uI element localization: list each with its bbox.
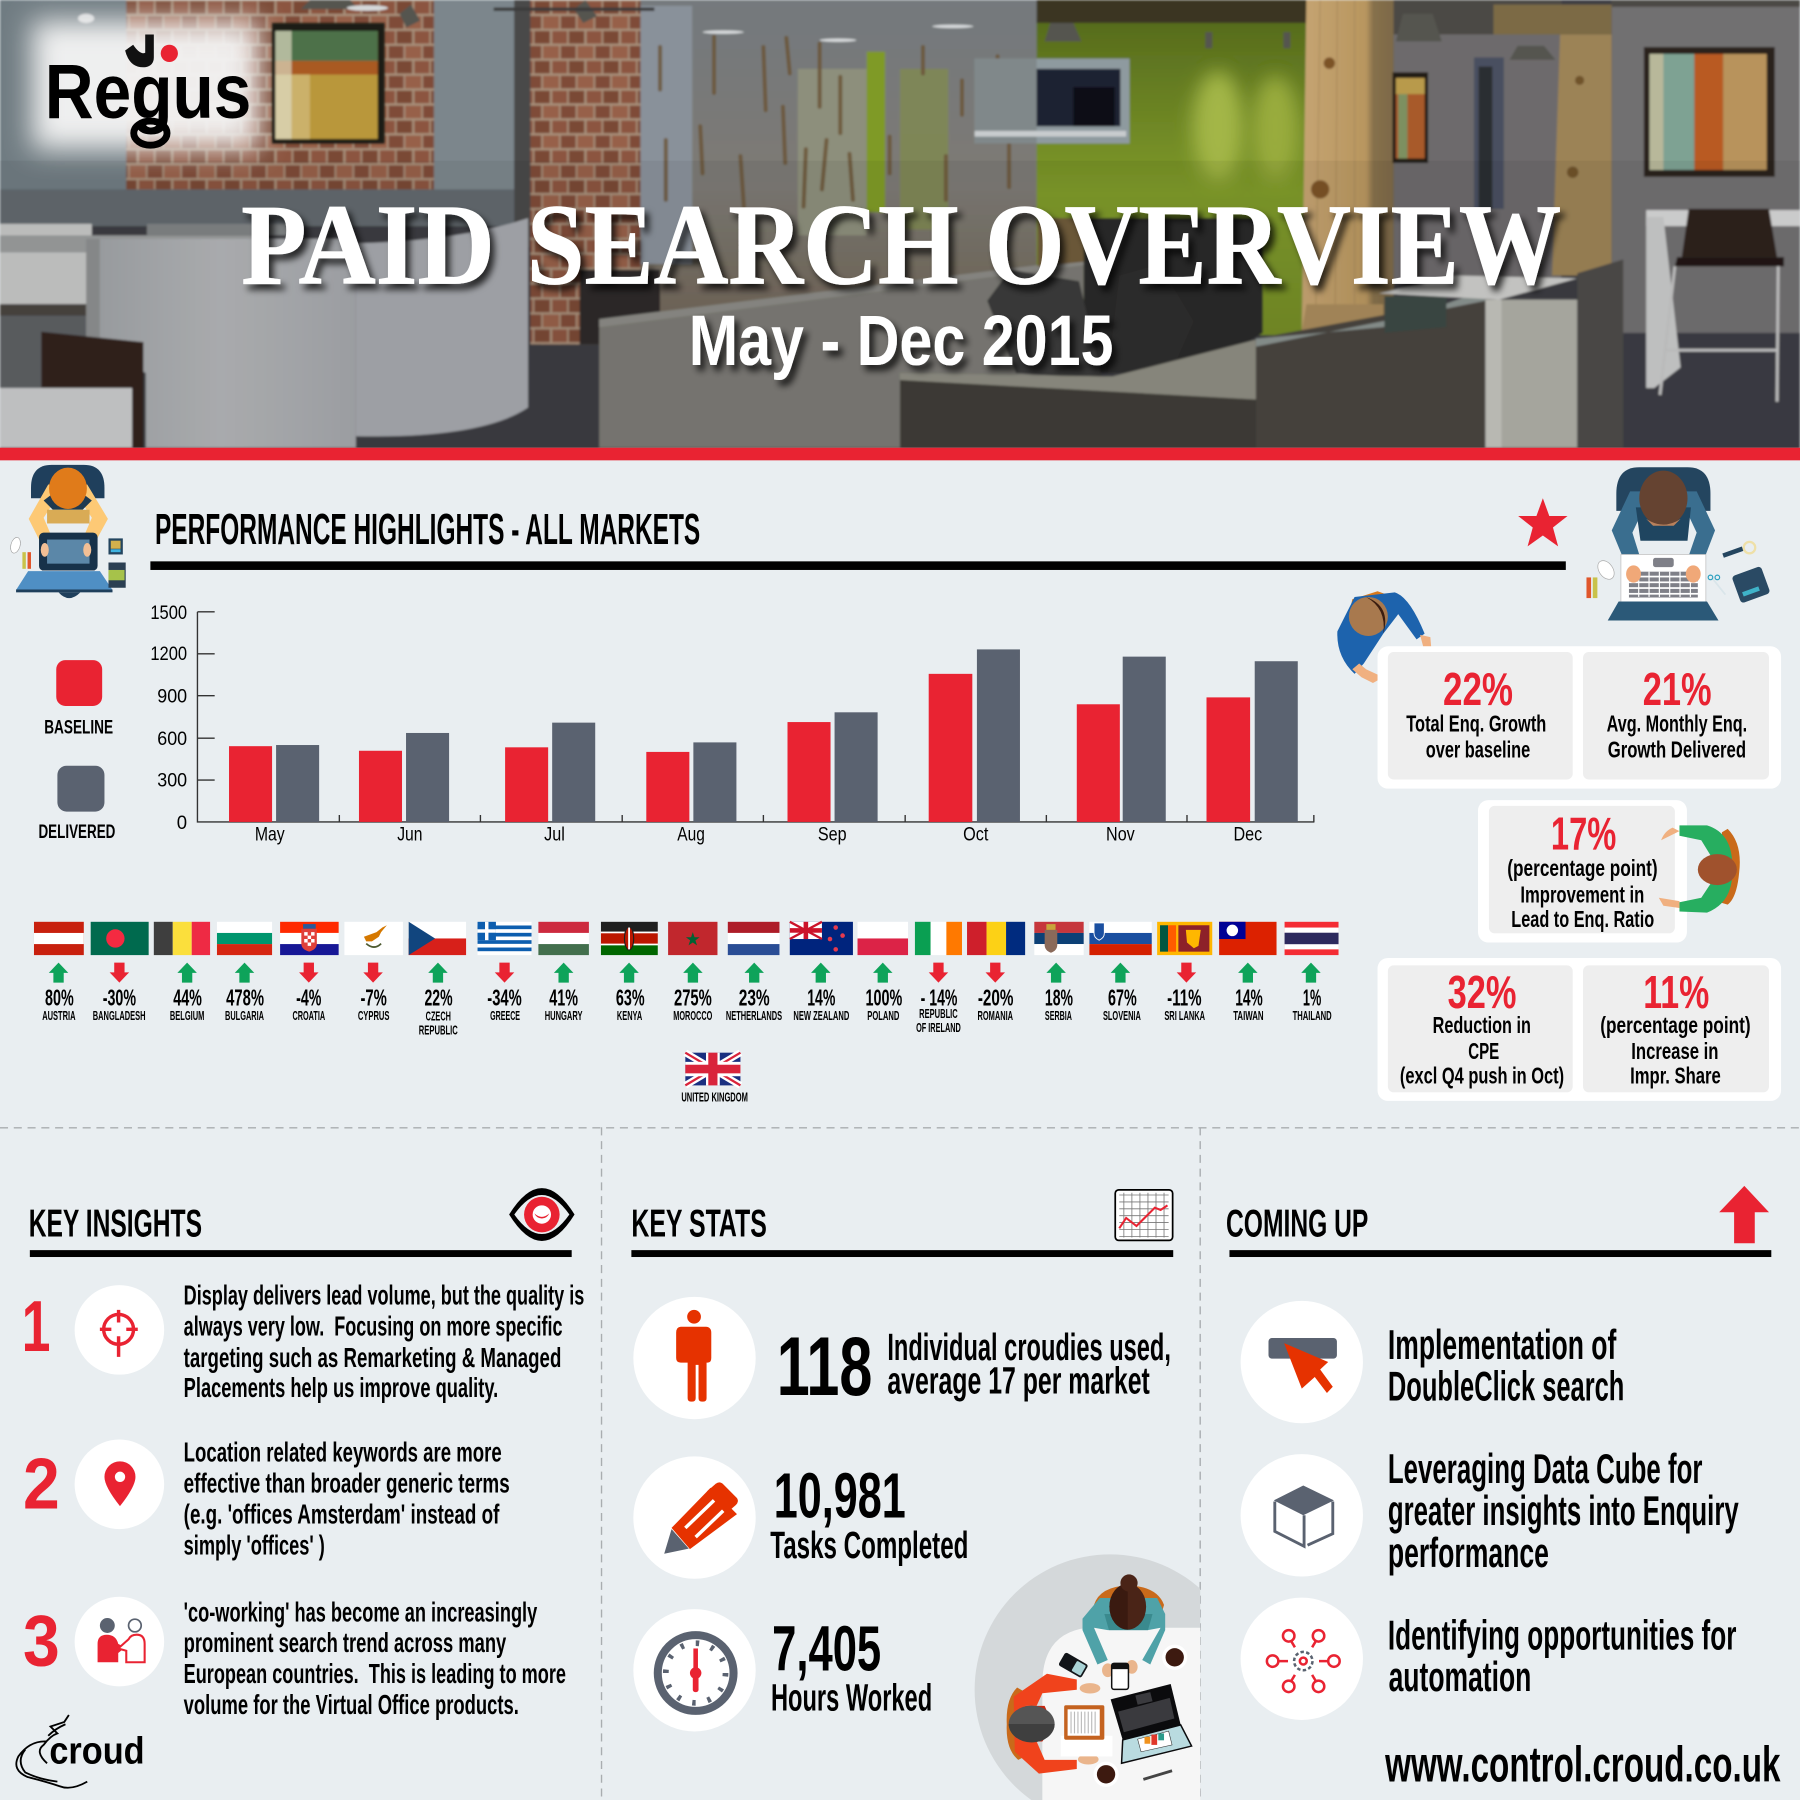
key metrics: row one panel: [1378, 646, 1781, 789]
metric: lead to enquiry ratio: Improvement in: [1520, 881, 1644, 907]
Bangladesh: [91, 922, 149, 1023]
Romania: ROMANIA: [977, 1008, 1013, 1023]
illustration: person in green: [1659, 825, 1740, 913]
Slovenia: SLOVENIA: [1103, 1008, 1141, 1023]
Netherlands: [726, 922, 782, 1023]
icon: target: [100, 1310, 138, 1357]
item: doubleclick: [1241, 1301, 1624, 1423]
metric: reduction in CPE: (excl Q4 push in Oct): [1400, 1063, 1564, 1089]
country performance flags: [34, 922, 1339, 1104]
icon: eye: [509, 1188, 575, 1241]
pen: [1143, 1771, 1172, 1779]
metric: reduction in CPE: Reduction in: [1433, 1012, 1531, 1038]
Slovenia: [1089, 922, 1152, 1023]
panel: key insights: [22, 1188, 584, 1720]
reception counters: [1256, 296, 1485, 448]
insight two text: [184, 1436, 510, 1560]
tablet: [1061, 1705, 1112, 1756]
icon: up arrow: [1719, 1186, 1769, 1243]
Republic of Ireland: OF IRELAND: [916, 1020, 961, 1035]
month labels: Dec: [1233, 823, 1262, 845]
Sri Lanka: -11%: [1167, 985, 1202, 1011]
heading: coming up: COMING UP: [1226, 1202, 1368, 1245]
item: data cube: performance: [1388, 1530, 1549, 1576]
item: automation: automation: [1389, 1654, 1531, 1700]
red divider band: [0, 448, 1800, 460]
insight three text: 'co-working' has become an increasingly: [184, 1597, 538, 1628]
item: doubleclick: DoubleClick search: [1388, 1364, 1624, 1410]
stat: hours: Hours Worked: [771, 1677, 932, 1719]
chart y labels: 0: [177, 812, 187, 834]
legend: delivered: [38, 766, 115, 843]
metric: impression share: Increase in: [1631, 1038, 1718, 1064]
insight three text: European countries. This is leading to more: [184, 1658, 566, 1689]
Bulgaria: BULGARIA: [225, 1008, 264, 1023]
Romania: [967, 922, 1025, 1023]
chart y labels: 600: [157, 728, 187, 750]
Serbia: 18%: [1045, 985, 1073, 1011]
Cyprus: -7%: [360, 985, 387, 1011]
legend: baseline: [44, 660, 113, 739]
stat: croudies: [633, 1297, 1171, 1419]
metric: reduction in CPE: 32%: [1448, 966, 1516, 1018]
icon: cube: [1274, 1485, 1334, 1546]
Republic of Ireland: [915, 922, 962, 1035]
tv: [1035, 56, 1132, 146]
legend: [38, 660, 115, 843]
New Zealand: [790, 922, 853, 1023]
month labels: Jul: [544, 823, 565, 845]
Taiwan: [1219, 922, 1277, 1023]
insight two text: simply 'offices' ): [184, 1529, 325, 1560]
month labels: Jun: [397, 823, 422, 845]
Kenya: 63%: [616, 985, 645, 1011]
illustration: woman at laptop: [9, 465, 126, 598]
panel: key stats: [631, 1190, 1173, 1731]
metric: average monthly enquiry growth: Growth Delivered: [1608, 737, 1746, 763]
Thailand: THAILAND: [1293, 1008, 1332, 1023]
Greece: GREECE: [490, 1008, 520, 1023]
metric: total enquiry growth: [1388, 652, 1573, 779]
New Zealand: 14%: [807, 985, 835, 1011]
Slovenia: 67%: [1108, 985, 1137, 1011]
stat: croudies: average 17 per market: [887, 1361, 1150, 1403]
insight two text: (e.g. 'offices Amsterdam' instead of: [184, 1498, 500, 1529]
insight three text: [184, 1597, 566, 1720]
metric: impression share: [1583, 965, 1769, 1092]
delivered bars: [276, 649, 1298, 822]
Morocco: [668, 922, 717, 1023]
insight two text: effective than broader generic terms: [184, 1467, 510, 1498]
green wall: [1037, 20, 1308, 335]
chairs and sofa: [1084, 218, 1263, 373]
Cyprus: CYPRUS: [358, 1008, 390, 1023]
metric: lead to enquiry ratio: (percentage point): [1507, 855, 1658, 881]
Taiwan: TAIWAN: [1233, 1008, 1264, 1023]
month labels: Nov: [1106, 823, 1135, 845]
croud logo: [16, 1715, 145, 1788]
Hungary: HUNGARY: [545, 1008, 583, 1023]
icon: line chart: [1115, 1190, 1173, 1240]
title: PAID: [241, 182, 495, 310]
croud logo: croud: [49, 1730, 145, 1772]
Croatia: [280, 922, 339, 1023]
Hungary: [538, 922, 589, 1023]
Republic of Ireland: - 14%: [921, 985, 957, 1011]
Poland: [858, 922, 908, 1023]
Croatia: -4%: [296, 985, 321, 1011]
calculator: [1058, 1652, 1088, 1678]
Taiwan: 14%: [1235, 985, 1263, 1011]
insight three: 3: [23, 1602, 60, 1682]
chart y labels: 300: [157, 769, 187, 791]
Czech Republic: 22%: [424, 985, 453, 1011]
Bangladesh: -30%: [103, 985, 136, 1011]
stat: hours: [633, 1609, 932, 1731]
New Zealand: NEW ZEALAND: [793, 1008, 849, 1023]
item: automation: [1241, 1598, 1736, 1720]
white glow behind logo: [32, 21, 259, 149]
Sri Lanka: SRI LANKA: [1164, 1008, 1205, 1023]
month labels: [255, 823, 1262, 845]
insight one text: [184, 1280, 584, 1403]
item: doubleclick: Implementation of: [1388, 1322, 1616, 1368]
person in red: [1007, 1674, 1100, 1774]
Czech Republic: [409, 922, 466, 1037]
title: OVERVIEW: [985, 182, 1561, 310]
insight one text: always very low. Focusing on more specific: [184, 1311, 562, 1342]
Serbia: SERBIA: [1045, 1008, 1072, 1023]
metric: total enquiry growth: over baseline: [1426, 737, 1530, 763]
icon: star: [1518, 498, 1568, 546]
illustration: man at laptop: [1586, 467, 1770, 620]
chart y labels: [150, 602, 187, 834]
icon: gear network: [1267, 1630, 1340, 1692]
Austria: [34, 922, 84, 1023]
heading rule: [150, 561, 1566, 570]
insight one text: Display delivers lead volume, but the quality is: [184, 1280, 584, 1311]
Austria: 80%: [45, 985, 74, 1011]
United Kingdom: UNITED KINGDOM: [681, 1089, 748, 1104]
metric: lead to enquiry ratio: 17%: [1551, 807, 1616, 859]
Czech Republic: CZECH: [426, 1009, 451, 1024]
Thailand: [1285, 922, 1339, 1023]
stat: hours: 7,405: [772, 1612, 881, 1684]
key metrics: row two panel: [1478, 800, 1687, 942]
insight one: [22, 1280, 584, 1403]
metric: impression share: (percentage point): [1600, 1012, 1751, 1038]
left painting: [272, 23, 385, 143]
panel: coming up: [1226, 1186, 1781, 1793]
insight three text: prominent search trend across many: [184, 1627, 507, 1658]
United Kingdom: [681, 1053, 748, 1104]
lights: [301, 0, 1555, 60]
item: data cube: [1241, 1446, 1739, 1576]
icon: pencil: [664, 1482, 738, 1554]
icon: cursor: [1268, 1338, 1337, 1393]
icon: two people: [98, 1618, 145, 1662]
chart y labels: 900: [157, 686, 187, 708]
insight two text: Location related keywords are more: [184, 1436, 502, 1467]
chart axes: [197, 612, 1314, 822]
Austria: AUSTRIA: [42, 1008, 76, 1023]
insight three: [23, 1597, 566, 1720]
metric: reduction in CPE: CPE: [1468, 1038, 1499, 1064]
insight one: 1: [22, 1287, 51, 1367]
month labels: Sep: [818, 823, 847, 845]
icon: map pin: [104, 1461, 135, 1506]
subtitle: May - Dec 2015: [689, 302, 1114, 381]
Greece: [478, 922, 532, 1023]
left furniture: [0, 224, 92, 304]
insight two: 2: [23, 1444, 60, 1524]
key metrics: row three panel: [1378, 958, 1781, 1101]
heading: key insights: KEY INSIGHTS: [29, 1202, 202, 1245]
metric: lead to enquiry ratio: [1489, 806, 1675, 933]
legend: baseline: BASELINE: [44, 717, 113, 739]
illustration: meeting table: [974, 1554, 1200, 1800]
Bulgaria: 478%: [226, 985, 264, 1011]
heading: performance highlights: PERFORMANCE HIGHLIGHTS - ALL MARKETS: [155, 506, 700, 554]
metric: impression share: 11%: [1643, 966, 1709, 1018]
phone: [1112, 1663, 1128, 1689]
coffee cup: [1162, 1645, 1187, 1670]
Bulgaria: [217, 922, 272, 1023]
Greece: -34%: [487, 985, 522, 1011]
Republic of Ireland: REPUBLIC: [919, 1006, 958, 1021]
Hungary: 41%: [549, 985, 578, 1011]
hero: office photo backdrop: [0, 0, 1800, 450]
stat: tasks: [633, 1456, 968, 1579]
Morocco: 275%: [674, 985, 712, 1011]
baseline bars: [229, 674, 1250, 822]
month labels: May: [255, 823, 285, 845]
person in teal: [1083, 1574, 1165, 1677]
metric: total enquiry growth: 22%: [1443, 663, 1513, 715]
stat: tasks: 10,981: [774, 1460, 906, 1532]
Cyprus: [344, 922, 403, 1023]
Morocco: MOROCCO: [673, 1008, 712, 1023]
stat: tasks: Tasks Completed: [770, 1525, 968, 1567]
insight two: [23, 1436, 510, 1560]
chart y labels: 1200: [150, 643, 187, 665]
Romania: -20%: [978, 985, 1013, 1011]
metric: average monthly enquiry growth: 21%: [1643, 663, 1712, 715]
Belgium: [154, 922, 210, 1023]
bar chart: [150, 602, 1314, 845]
icon: person: [676, 1310, 711, 1402]
Croatia: CROATIA: [292, 1008, 325, 1023]
Czech Republic: REPUBLIC: [419, 1022, 458, 1037]
heading: key stats: KEY STATS: [631, 1202, 767, 1245]
icon: clock: [658, 1635, 734, 1711]
insight one text: Placements help us improve quality.: [184, 1372, 498, 1403]
Thailand: 1%: [1303, 985, 1321, 1011]
Poland: 100%: [866, 985, 902, 1011]
Belgium: 44%: [173, 985, 202, 1011]
title: SEARCH: [527, 182, 959, 310]
darkening tone over photo: [0, 161, 1800, 448]
Serbia: [1034, 922, 1084, 1023]
stat: croudies: 118: [777, 1319, 872, 1413]
metric: average monthly enquiry growth: [1583, 652, 1769, 779]
Netherlands: 23%: [739, 985, 770, 1011]
metric: reduction in CPE: [1388, 965, 1573, 1092]
month labels: Oct: [963, 823, 989, 845]
metric: lead to enquiry ratio: Lead to Enq. Ratio: [1511, 906, 1654, 932]
month labels: Aug: [677, 823, 705, 845]
chart y labels: 1500: [150, 602, 187, 624]
stat: croudies: Individual croudies used,: [887, 1327, 1171, 1369]
right table and stool: [1622, 332, 1800, 336]
coffee cup: [1093, 1762, 1119, 1787]
insight three text: volume for the Virtual Office products.: [184, 1689, 519, 1720]
metric: total enquiry growth: Total Enq. Growth: [1406, 710, 1546, 736]
Bangladesh: BANGLADESH: [93, 1008, 146, 1023]
center wall: [599, 259, 1084, 448]
Kenya: [601, 922, 658, 1023]
legend: delivered: DELIVERED: [38, 821, 115, 843]
laptop: [1111, 1684, 1192, 1763]
Sri Lanka: [1157, 922, 1212, 1023]
illustration: person in blue: [1337, 591, 1432, 683]
metric: impression share: Impr. Share: [1630, 1063, 1721, 1089]
title: [241, 182, 1561, 310]
Belgium: BELGIUM: [170, 1008, 204, 1023]
insight one text: targeting such as Remarketing & Managed: [184, 1342, 561, 1373]
Poland: POLAND: [867, 1008, 899, 1023]
Regus logo: Regus: [45, 49, 251, 135]
Kenya: KENYA: [617, 1008, 642, 1023]
Netherlands: NETHERLANDS: [726, 1008, 782, 1023]
